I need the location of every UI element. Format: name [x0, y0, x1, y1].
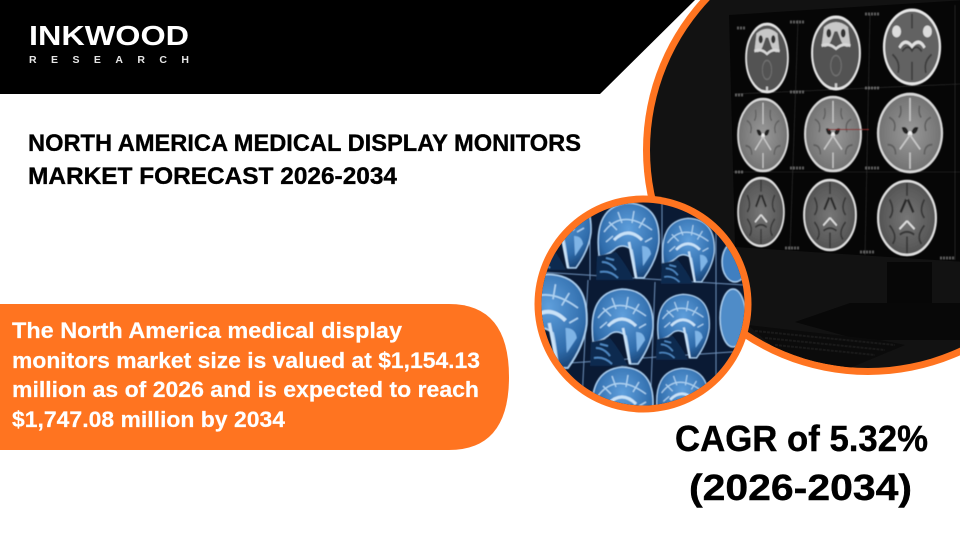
- photo: blue sagittal MRI film: [534, 196, 752, 412]
- title: NORTH AMERICA MEDICAL DISPLAY MONITORS: [28, 130, 581, 157]
- CAGR stat: CAGR of 5.32%: [675, 418, 928, 459]
- header band: [0, 0, 695, 94]
- monitor stand and keyboard: [770, 262, 960, 368]
- CAGR stat: [675, 418, 928, 508]
- logo: Inkwood Research: INKWOOD: [29, 20, 189, 51]
- title: [28, 130, 581, 190]
- photo: radiology monitor with brain scans: [640, 0, 960, 380]
- logo: Inkwood Research: RESEARCH: [29, 54, 189, 66]
- CAGR stat: (2026-2034): [689, 467, 912, 508]
- callout: market size: monitors market size is valued at $1,154.13: [12, 348, 480, 373]
- title: MARKET FORECAST 2026-2034: [28, 163, 398, 190]
- callout: market size: $1,747.08 million by 2034: [12, 407, 286, 432]
- callout: market size: The North America medical display: [12, 318, 403, 343]
- callout: market size: [0, 304, 509, 450]
- logo: Inkwood Research: [29, 20, 189, 66]
- callout: market size: million as of 2026 and is expected to reach: [12, 377, 479, 402]
